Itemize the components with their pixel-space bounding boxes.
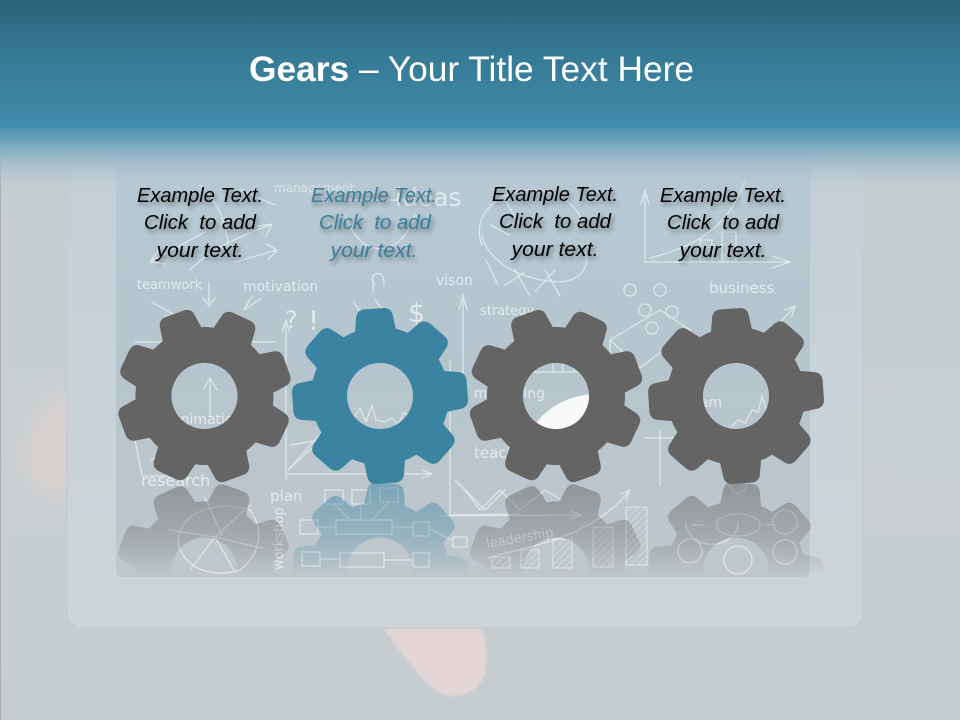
gear 3 [440, 280, 672, 512]
text block 2: your text. [328, 239, 418, 262]
whiteboard doodles: motivation [243, 279, 318, 295]
pale hand glow behind tablet [25, 385, 70, 500]
text block 4 [660, 184, 786, 262]
whiteboard doodles: plan [270, 487, 302, 505]
title: Gears – Your Title Text Here [249, 50, 694, 89]
whiteboard doodles: teamwork [137, 278, 203, 293]
whiteboard doodles: teach [474, 444, 516, 462]
text block 3: Click to add [499, 210, 612, 233]
whiteboard doodles: research [141, 471, 210, 490]
text block 1 [137, 184, 263, 262]
whiteboard doodles: ? [285, 306, 298, 334]
reflection: gear 3 [470, 484, 640, 568]
header fade [0, 128, 960, 195]
whiteboard doodles: marketing [474, 386, 545, 402]
gear 1 [88, 280, 321, 512]
text block 1: your text. [154, 239, 244, 262]
text block 2 [311, 184, 437, 262]
whiteboard doodles: ideas [395, 183, 462, 212]
text block 2: Example Text. [311, 184, 437, 207]
whiteboard doodles: animation [172, 412, 242, 428]
leadership bars [492, 507, 647, 568]
text block 4: your text. [677, 239, 766, 262]
text block 4: Example Text. [660, 184, 786, 207]
text block 1: Example Text. [137, 184, 263, 207]
whiteboard doodles: leadership [485, 525, 555, 552]
whiteboard doodles [135, 180, 797, 574]
tablet frame [67, 110, 863, 628]
whiteboard doodles: ! [308, 304, 319, 337]
reflection: gear 1 [118, 484, 289, 568]
finger [384, 629, 487, 696]
text block 2: Click to add [319, 211, 432, 234]
text block 3 [492, 183, 618, 261]
text block 1: Click to add [144, 211, 257, 234]
whiteboard doodles: program [662, 395, 722, 411]
whiteboard doodles: $ [408, 298, 425, 329]
chart wedge [530, 394, 592, 432]
whiteboard doodles: workshop [272, 507, 287, 570]
tablet screen [116, 150, 810, 577]
text block 3: your text. [509, 238, 598, 261]
reflection: gear 4 [649, 483, 824, 567]
text block 4: Click to add [667, 211, 780, 234]
gear 4 [643, 303, 829, 489]
whiteboard doodles: business [709, 279, 775, 297]
gear 2 [287, 303, 473, 489]
header band [0, 0, 960, 128]
reflection: gear 2 [292, 483, 468, 568]
whiteboard doodles: strategy [480, 304, 535, 319]
text block 3: Example Text. [492, 183, 618, 206]
whiteboard doodles: vison [436, 273, 473, 289]
left edge line [0, 128, 1, 720]
gear reflections [118, 483, 824, 568]
whiteboard doodles: management [274, 181, 355, 195]
